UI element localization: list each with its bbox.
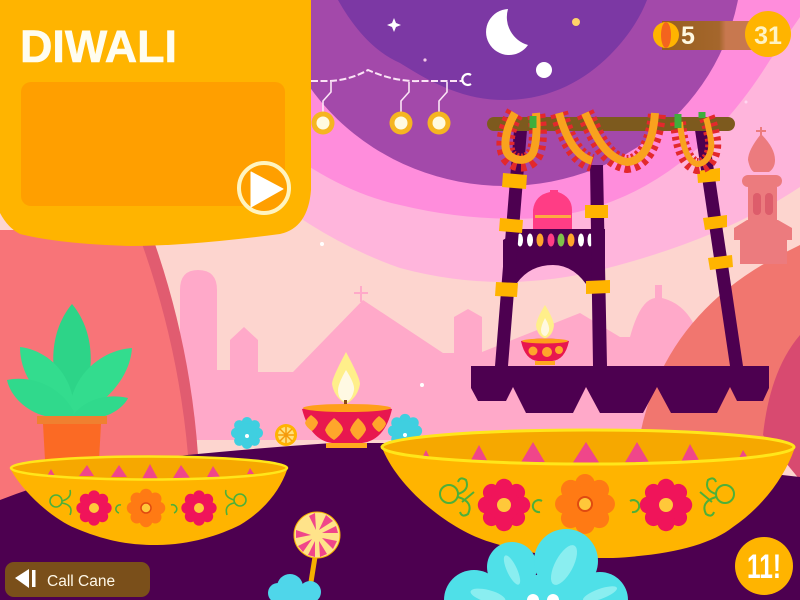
score bar [653,11,791,57]
swing structure [487,112,743,366]
big bowl [381,430,795,558]
small bowl [10,456,288,545]
right coral hill [640,245,800,480]
dome [533,190,572,229]
small blue flower at bottom [268,574,321,600]
background ring: dark purple [338,0,647,100]
inner panel [21,82,285,206]
speaker icon [15,569,36,588]
post bands [495,168,733,297]
center diya [302,352,392,448]
level badge: 31 [754,22,782,50]
potted plant [7,304,132,460]
lollipop [294,512,340,582]
coin count: 5 [681,22,695,50]
citrus slice [275,424,297,446]
large blue flower [444,529,628,600]
minaret tower [734,127,792,264]
small diya on platform [521,305,569,365]
button label: Call Cane [47,573,115,590]
beam [487,117,735,131]
arch [503,229,605,290]
title panel [0,0,311,246]
call cane button [5,562,150,597]
city skyline silhouette [180,270,720,440]
small flower behind big bowl [388,414,422,448]
pause button: 11! [747,548,781,586]
string lights [311,70,471,134]
posts [495,130,743,366]
small flower left of diya [231,417,263,449]
coin icon [653,22,679,48]
title: DIWALI [20,21,177,72]
ground [0,443,800,600]
arch lights [517,234,592,246]
pause button [735,537,793,595]
play button [239,163,289,213]
background ring: mid purple [268,0,742,186]
left coral hill [0,230,198,510]
background ring: bright pink [260,0,800,219]
platform [471,366,769,413]
stars and moon [320,9,748,387]
garlands [505,112,713,166]
background ring: light pink [250,0,800,282]
